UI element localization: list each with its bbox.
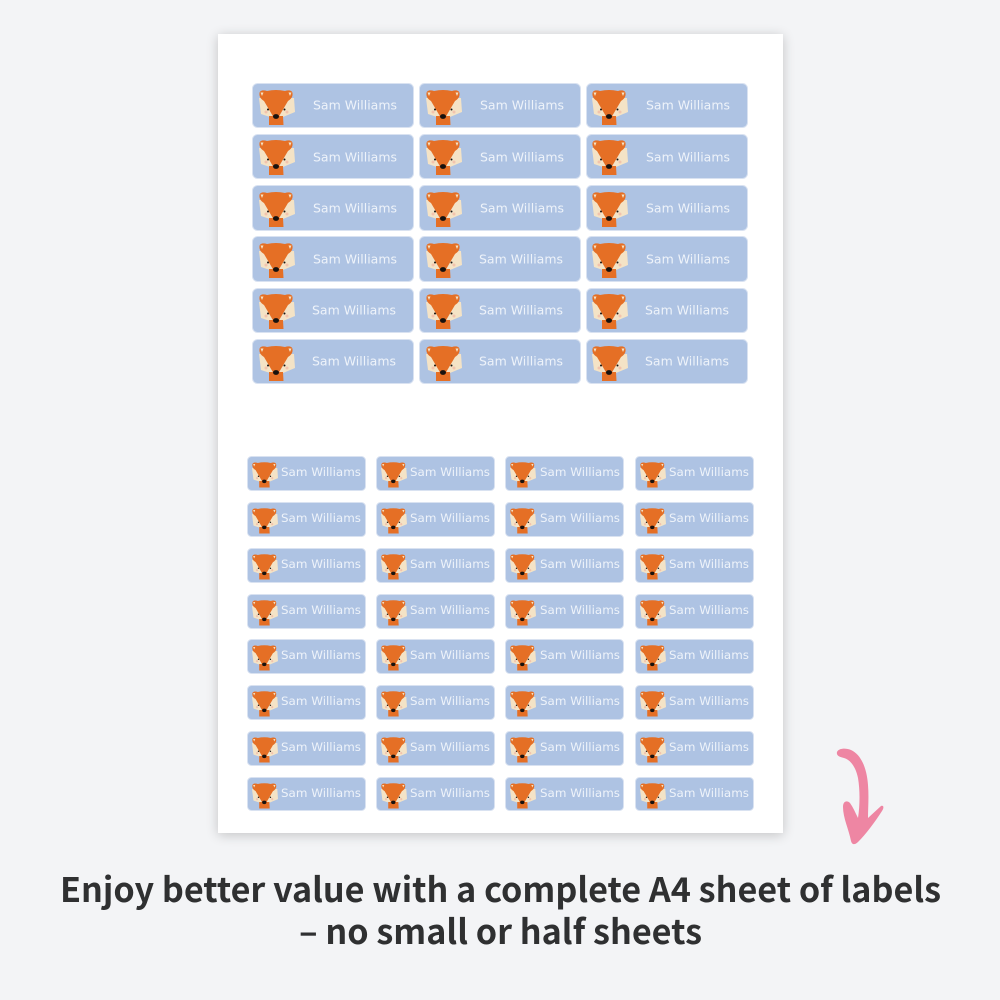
small label r6 c2: Sam Williams	[410, 694, 490, 708]
small label r5 c2: Sam Williams	[410, 648, 490, 662]
small label r4 c1	[248, 594, 366, 628]
small label r4 c3	[506, 594, 624, 628]
panel: A4 sheet	[218, 34, 783, 833]
small label r2 c4: Sam Williams	[669, 511, 749, 525]
small label r4 c4: Sam Williams	[669, 603, 749, 617]
small label r2 c4	[636, 502, 754, 536]
large label r3 c3	[586, 186, 748, 230]
small label r5 c3	[506, 640, 624, 674]
large label r6 c1: Sam Williams	[312, 354, 396, 368]
small label r5 c2	[376, 640, 494, 674]
large label r3 c2: Sam Williams	[480, 202, 564, 216]
small label r4 c1: Sam Williams	[281, 603, 361, 617]
heading: Enjoy better value with a complete A4 sheet of labels	[60, 863, 941, 912]
large label r1 c1: Sam Williams	[313, 98, 397, 112]
small label r8 c3	[506, 778, 624, 810]
small label r5 c3: Sam Williams	[540, 648, 620, 662]
large label r5 c2	[420, 288, 580, 332]
small label r8 c2	[376, 778, 494, 810]
large label r3 c3: Sam Williams	[646, 202, 730, 216]
small label r8 c1: Sam Williams	[281, 786, 361, 800]
small label r1 c3: Sam Williams	[540, 465, 620, 479]
large label r4 c1: Sam Williams	[313, 252, 397, 266]
large label r2 c1	[252, 134, 414, 178]
small label r3 c3	[506, 548, 624, 582]
large label r1 c3	[586, 84, 748, 128]
small label r7 c4	[636, 732, 754, 766]
large label r5 c1	[252, 288, 414, 332]
small label r2 c2: Sam Williams	[410, 511, 490, 525]
large label r4 c1	[252, 236, 414, 282]
small label r1 c4: Sam Williams	[669, 465, 749, 479]
small label r6 c4	[636, 686, 754, 720]
small label r3 c2	[376, 548, 494, 582]
small label r7 c1: Sam Williams	[281, 740, 361, 754]
large label r2 c2: Sam Williams	[480, 150, 564, 164]
large label r1 c2	[420, 84, 580, 128]
small label r7 c3: Sam Williams	[540, 740, 620, 754]
small label r1 c3	[506, 456, 624, 490]
small label r8 c4: Sam Williams	[669, 786, 749, 800]
large label r6 c2	[420, 340, 580, 384]
large label r4 c3	[586, 236, 748, 282]
small label r7 c1	[248, 732, 366, 766]
small label r8 c4	[636, 778, 754, 810]
large label r2 c2	[420, 134, 580, 178]
small label r8 c2: Sam Williams	[410, 786, 490, 800]
small label r6 c4: Sam Williams	[669, 694, 749, 708]
large label r4 c2	[420, 236, 580, 282]
small label r3 c2: Sam Williams	[410, 557, 490, 571]
sheet shadow	[218, 36, 783, 835]
large label r5 c3	[586, 288, 748, 332]
small label r3 c1: Sam Williams	[281, 557, 361, 571]
large label r2 c3: Sam Williams	[646, 150, 730, 164]
large label r1 c1	[252, 84, 414, 128]
large label r1 c3: Sam Williams	[646, 98, 730, 112]
large label r3 c2	[420, 186, 580, 230]
large label r4 c3: Sam Williams	[646, 252, 730, 266]
small label r5 c1: Sam Williams	[281, 648, 361, 662]
small label r2 c3: Sam Williams	[540, 511, 620, 525]
small label r1 c4	[636, 456, 754, 490]
large label r2 c1: Sam Williams	[313, 150, 397, 164]
small label r4 c2: Sam Williams	[410, 603, 490, 617]
small label r6 c3: Sam Williams	[540, 694, 620, 708]
small label r3 c4	[636, 548, 754, 582]
heading	[60, 863, 941, 954]
heading: – no small or half sheets	[299, 905, 702, 954]
small label r3 c3: Sam Williams	[540, 557, 620, 571]
small label r5 c1	[248, 640, 366, 674]
arrow: pink hand-drawn pointing down	[837, 749, 883, 844]
large label r3 c1: Sam Williams	[313, 202, 397, 216]
large label r5 c2: Sam Williams	[479, 304, 563, 318]
small label r7 c3	[506, 732, 624, 766]
large label r6 c3	[586, 340, 748, 384]
small label r2 c1	[248, 502, 366, 536]
large label r4 c2: Sam Williams	[479, 252, 563, 266]
small label r1 c1	[248, 456, 366, 490]
large label r5 c1: Sam Williams	[312, 304, 396, 318]
small label r3 c1	[248, 548, 366, 582]
small label r8 c3: Sam Williams	[540, 786, 620, 800]
small label r3 c4: Sam Williams	[669, 557, 749, 571]
large label r3 c1	[252, 186, 414, 230]
large label r6 c2: Sam Williams	[479, 354, 563, 368]
small label r8 c1	[248, 778, 366, 810]
small label r1 c2: Sam Williams	[410, 465, 490, 479]
large label r5 c3: Sam Williams	[645, 304, 729, 318]
small label r1 c1: Sam Williams	[281, 465, 361, 479]
small label r7 c2	[376, 732, 494, 766]
small label r4 c2	[376, 594, 494, 628]
small label r5 c4	[636, 640, 754, 674]
small label r7 c2: Sam Williams	[410, 740, 490, 754]
small label r5 c4: Sam Williams	[669, 648, 749, 662]
small label r2 c2	[376, 502, 494, 536]
small label r2 c1: Sam Williams	[281, 511, 361, 525]
small label r4 c3: Sam Williams	[540, 603, 620, 617]
large label r6 c3: Sam Williams	[645, 354, 729, 368]
small label r6 c3	[506, 686, 624, 720]
small label r6 c2	[376, 686, 494, 720]
small label r2 c3	[506, 502, 624, 536]
large label r1 c2: Sam Williams	[480, 98, 564, 112]
small label r1 c2	[376, 456, 494, 490]
large label r6 c1	[252, 340, 414, 384]
small label r6 c1	[248, 686, 366, 720]
small label r6 c1: Sam Williams	[281, 694, 361, 708]
small label r4 c4	[636, 594, 754, 628]
large label r2 c3	[586, 134, 748, 178]
small label r7 c4: Sam Williams	[669, 740, 749, 754]
